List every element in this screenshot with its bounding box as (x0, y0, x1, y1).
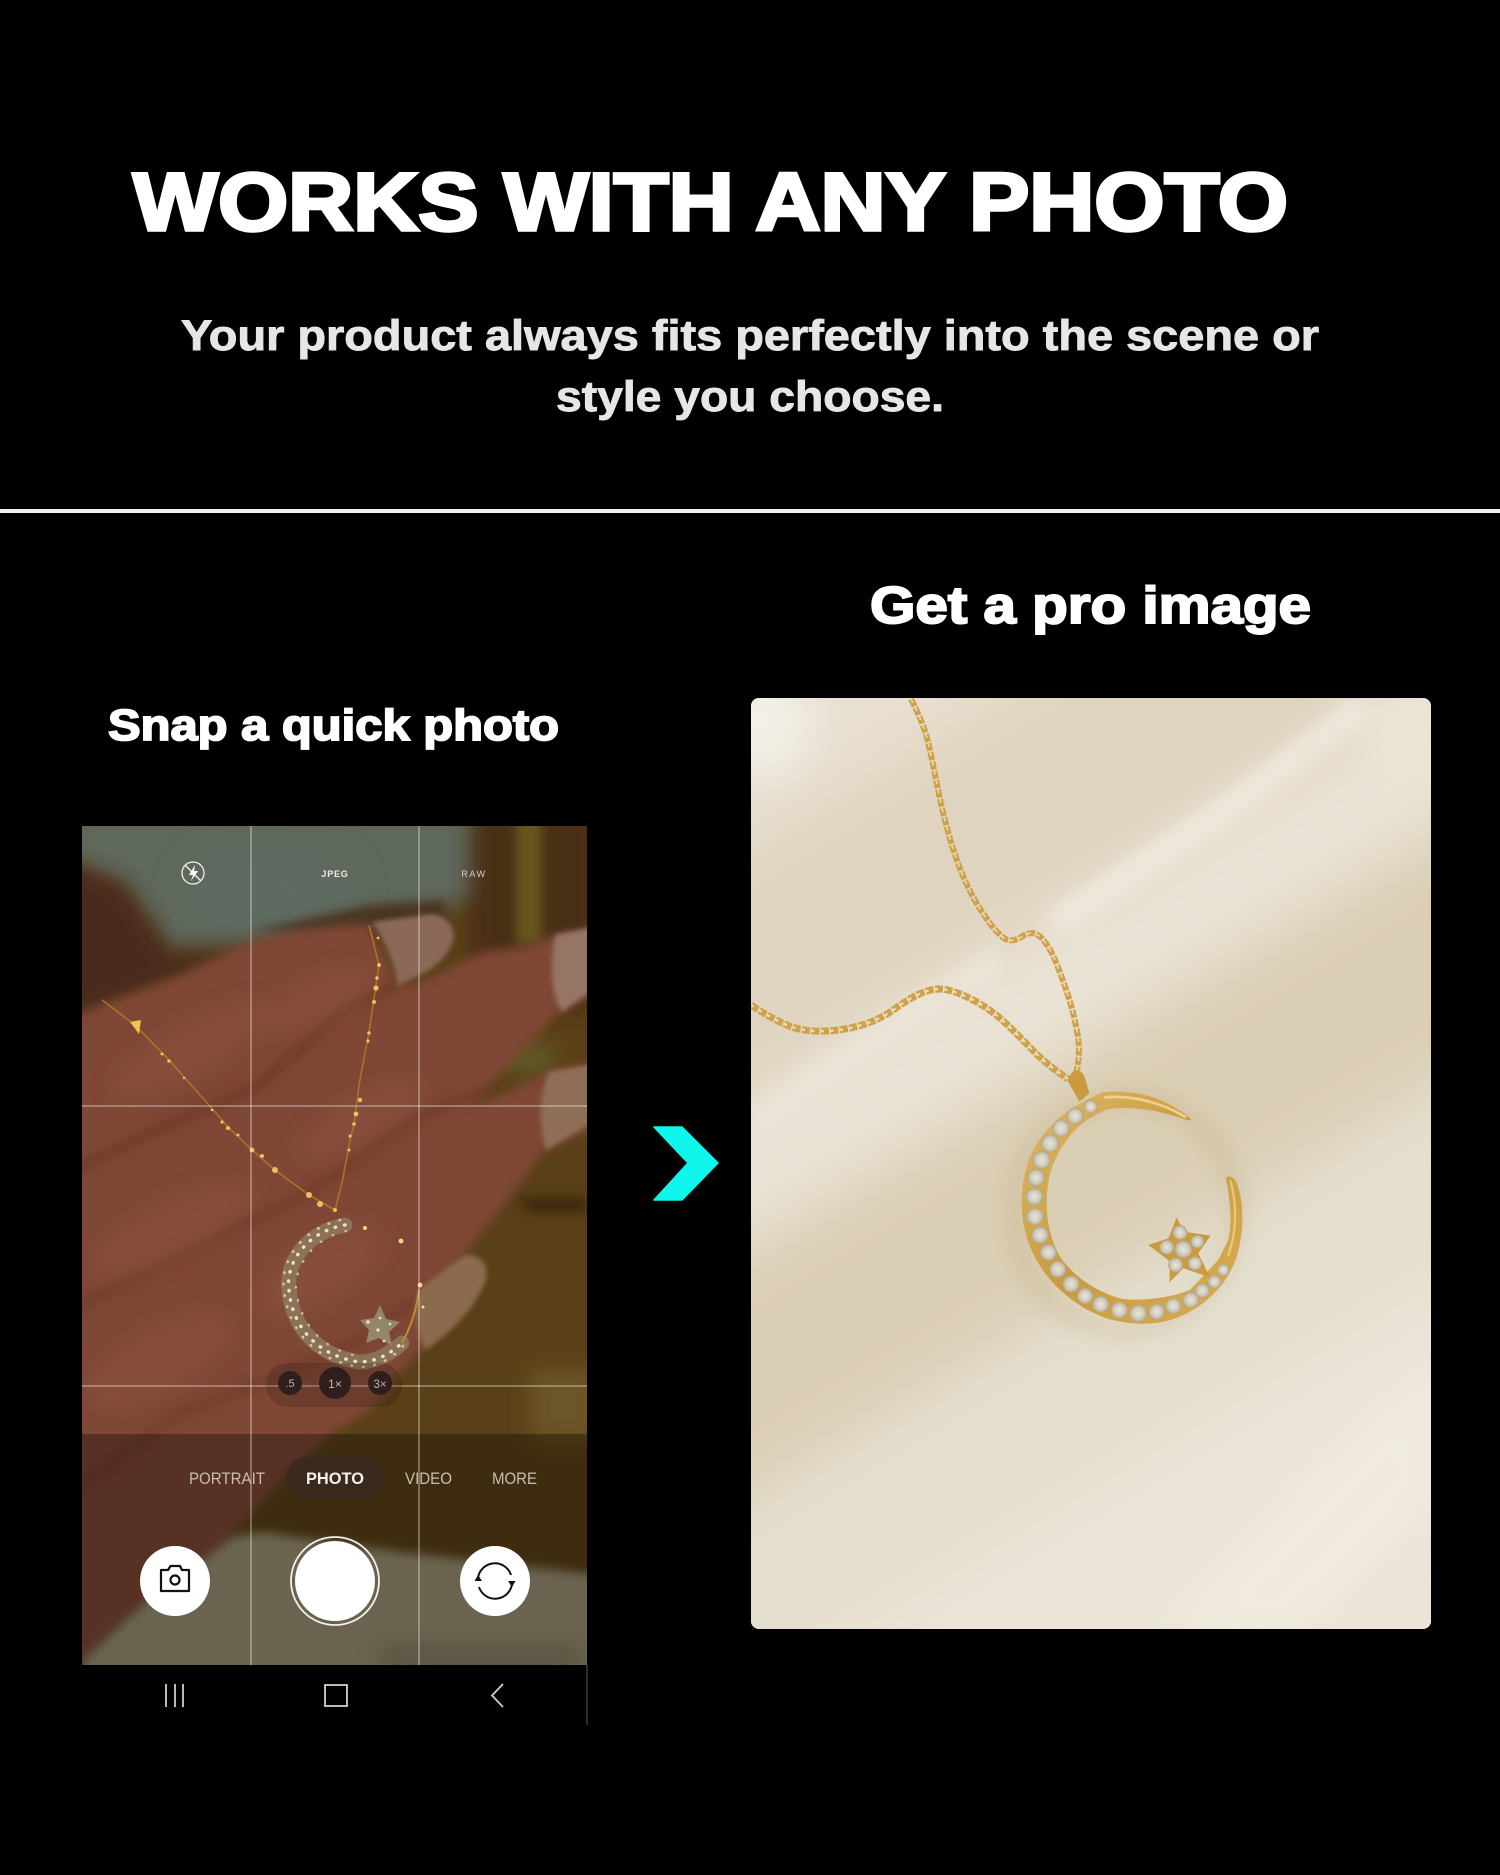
camera mode selector (189, 1457, 537, 1499)
horn highlights (1105, 1097, 1185, 1117)
icon: flip camera button (460, 1546, 530, 1616)
camera grid (82, 826, 587, 1665)
title: WORKS WITH ANY PHOTO (133, 157, 1288, 248)
camera mode selector: VIDEO (405, 1469, 452, 1488)
crescent band (1022, 1092, 1242, 1324)
pendant shadow (1013, 1098, 1237, 1330)
divider (0, 509, 1500, 513)
phone photo: hand holding necklace (60, 810, 600, 1680)
necklace chains (751, 699, 1079, 1079)
subtitle: style you choose. (556, 374, 944, 421)
star (1148, 1217, 1211, 1283)
bottom control band shade (82, 1434, 587, 1665)
camera mode selector: PHOTO (306, 1469, 364, 1488)
heading: snap a quick photo: Snap a quick photo (108, 701, 559, 750)
subtitle (181, 313, 1319, 421)
hand (70, 924, 600, 1670)
gemstones (1026, 1100, 1229, 1322)
heading: get a pro image: Get a pro image (870, 577, 1311, 635)
panel: professional product image (751, 698, 1431, 1629)
shutter button (291, 1537, 379, 1625)
zoom selector: .5 (285, 1378, 295, 1390)
subtitle: Your product always fits perfectly into the scene or (181, 313, 1319, 360)
icon: flash off (182, 862, 204, 884)
bail (1067, 1070, 1089, 1102)
blurry pendant ring (288, 1225, 402, 1362)
label: RAW: RAW (461, 869, 487, 879)
label: JPEG: JPEG (321, 869, 349, 879)
blurry star (360, 1305, 400, 1346)
phone navigation bar (166, 1665, 587, 1725)
icon: gallery camera button (140, 1546, 210, 1616)
satin fabric (751, 698, 1431, 1629)
zoom selector (266, 1363, 402, 1407)
camera mode selector: PORTRAIT (189, 1469, 265, 1488)
zoom selector: 1× (328, 1377, 342, 1391)
fingernails (372, 914, 600, 1350)
zoom selector: 3× (373, 1379, 387, 1391)
panel: phone camera screen (60, 810, 600, 1725)
camera mode selector: MORE (492, 1469, 537, 1488)
necklace chains (102, 925, 379, 1210)
arrow (654, 1127, 718, 1200)
crescent moon and star pendant (1022, 1070, 1242, 1324)
blurred table (82, 1532, 600, 1680)
